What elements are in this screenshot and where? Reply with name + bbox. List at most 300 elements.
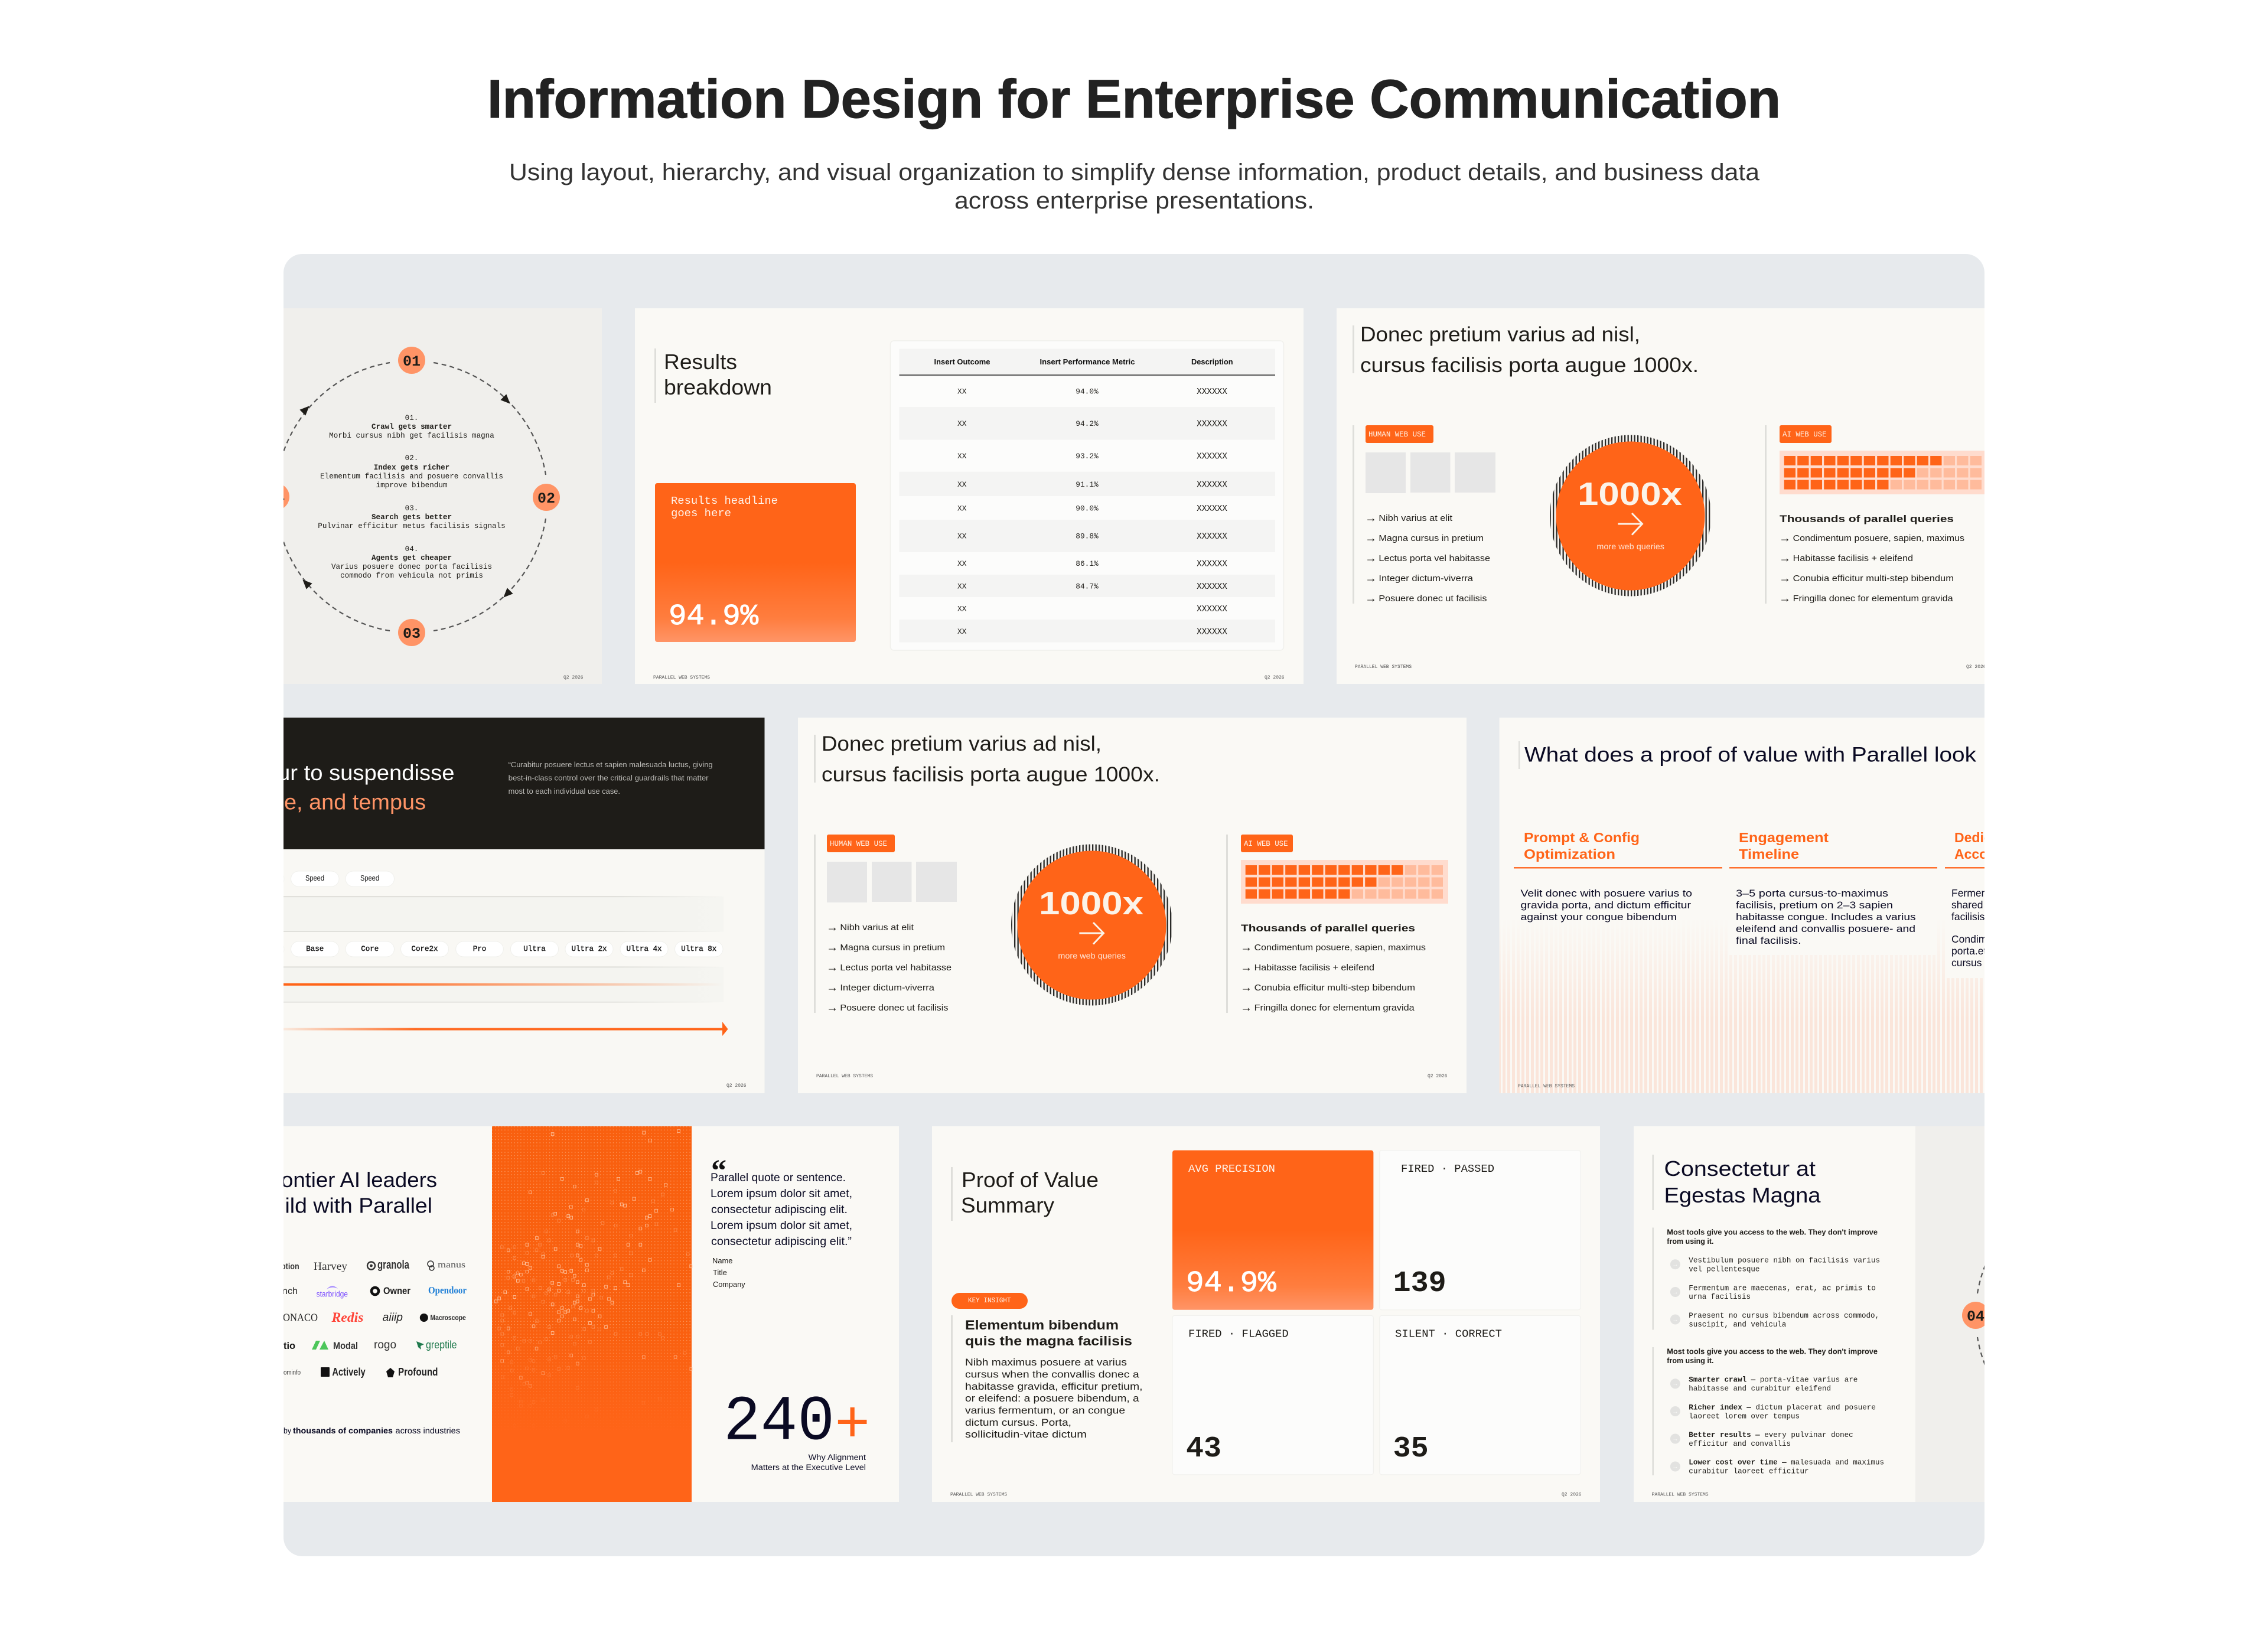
stat card: silent correct xyxy=(1380,1315,1581,1475)
header quote: best-in-class control over the critical guardrails that matter xyxy=(509,774,709,782)
quote: Lorem ipsum dolor sit amet, xyxy=(711,1188,852,1200)
first list block: vel pellentesque xyxy=(1689,1265,1759,1273)
cycle step text: Pulvinar efficitur metus facilisis signals xyxy=(318,522,506,530)
heading xyxy=(822,732,1160,786)
table body: XXXXXX xyxy=(1197,387,1227,397)
heading: Results xyxy=(664,350,737,374)
second list block: → xyxy=(1672,1409,1678,1415)
heading: cursus facilisis porta augue 1000x. xyxy=(822,763,1160,786)
cycle step text: 02. xyxy=(405,454,418,462)
human web use column: Nibh varius at elit xyxy=(1379,514,1452,523)
column: prompt and config: Prompt & Config xyxy=(1524,830,1640,845)
first list block: → xyxy=(1672,1317,1678,1323)
column: dedicated account: shared xyxy=(1951,899,1983,911)
heading: Summary xyxy=(961,1193,1054,1217)
column: dedicated account: Fermentum xyxy=(1951,887,2004,899)
table body: 90.0% xyxy=(1076,504,1099,513)
quote: Parallel quote or sentence. xyxy=(711,1172,846,1184)
logos caption: thousands of companies xyxy=(293,1426,393,1435)
first list block: urna facilisis xyxy=(1689,1293,1751,1301)
panel: proof of value columns slide xyxy=(1500,718,2168,1093)
first list block: Vestibulum posuere nibh on facilisis varius xyxy=(1689,1256,1880,1265)
cycle step text: Crawl gets smarter xyxy=(372,423,452,431)
table body: XX xyxy=(957,582,967,591)
first list block: suscipit, and vehicula xyxy=(1689,1321,1787,1329)
heading xyxy=(665,354,770,395)
numbered nodes: 01 xyxy=(403,353,421,370)
key insight text xyxy=(951,1315,1142,1442)
slide gallery xyxy=(284,308,1984,1502)
table body: XXXXXX xyxy=(1197,582,1227,592)
human web use column: → xyxy=(1365,532,1377,545)
human web use column: → xyxy=(826,982,838,995)
human web use column: → xyxy=(1365,511,1377,524)
stat card: fired flagged: 43 xyxy=(1186,1432,1221,1466)
cycle step text: Agents get cheaper xyxy=(372,554,452,562)
footer xyxy=(1355,665,1984,669)
dark header xyxy=(96,718,764,849)
human web use column: Integer dictum-viverra xyxy=(840,983,935,993)
first list block: → xyxy=(1672,1262,1678,1268)
heading: Egestas Magna xyxy=(1664,1183,1821,1207)
1000x circle: 1000x xyxy=(1039,885,1143,921)
heading xyxy=(961,1168,1099,1217)
column: dedicated account: porta.et xyxy=(1951,945,1986,957)
table body: 91.1% xyxy=(1076,480,1099,489)
second list block: → xyxy=(1672,1436,1678,1442)
ai web use column: → xyxy=(1240,941,1252,954)
1000x circle: 1000x xyxy=(1578,475,1682,512)
first list block: Praesent no cursus bibendum across commodo, xyxy=(1689,1312,1879,1320)
heading: Consectetur at xyxy=(1664,1156,1816,1181)
key insight text: habitasse gravida, efficitur pretium, xyxy=(965,1381,1142,1392)
customer logos: Opendoor xyxy=(428,1285,467,1296)
table body: XXXXXX xyxy=(1197,452,1227,462)
speed pills: Speed xyxy=(360,874,379,882)
key insight text: or eleifend: a posuere bibendum, a xyxy=(965,1393,1139,1404)
human web use column: → xyxy=(1365,552,1377,565)
ai web use column: Fringilla donec for elementum gravida xyxy=(1793,594,1954,604)
panel: cycle diagram slide xyxy=(284,308,602,684)
table body: XX xyxy=(957,605,967,613)
table header xyxy=(934,359,1233,366)
table body: XXXXXX xyxy=(1197,605,1227,614)
customer logos: Redis xyxy=(331,1310,364,1325)
table header: Description xyxy=(1191,357,1233,366)
quote: consectetur adipiscing elit. xyxy=(711,1204,848,1216)
column: engagement timeline: final facilisis. xyxy=(1736,935,1801,946)
table body: XXXXXX xyxy=(1197,481,1227,490)
1000x circle xyxy=(1011,845,1172,1005)
human web use column: Lectus porta vel habitasse xyxy=(840,963,951,973)
footer xyxy=(950,1492,1582,1498)
panel: cycle diagram slide repeat xyxy=(1915,1126,2090,1502)
results table xyxy=(891,341,1284,650)
customer logos: starbridge xyxy=(317,1290,348,1298)
tier pills: Ultra 2x xyxy=(571,945,607,953)
second list block: Smarter crawl — porta-vitae varius are xyxy=(1689,1376,1858,1384)
column: engagement timeline: eleifend and convallis posuere- and xyxy=(1736,923,1915,934)
table body: XXXXXX xyxy=(1197,532,1227,542)
column: prompt and config xyxy=(1514,830,1722,923)
customer logos: granola xyxy=(377,1259,410,1272)
table body: XXXXXX xyxy=(1197,560,1227,569)
speed pills: Speed xyxy=(305,874,324,882)
cycle step text: 04. xyxy=(405,545,418,553)
column: dedicated account xyxy=(1945,830,2019,969)
customer logos: Harvey xyxy=(314,1260,348,1273)
table body: 89.8% xyxy=(1076,532,1099,541)
second list block: habitasse and curabitur eleifend xyxy=(1689,1384,1831,1393)
panel: 1000x comparison slide repeat xyxy=(798,718,1467,1093)
table body: XX xyxy=(957,504,967,513)
table body: XXXXXX xyxy=(1197,627,1227,637)
ai web use column: AI WEB USE xyxy=(1244,840,1288,848)
cycle step text: Elementum facilisis and posuere convallis xyxy=(320,472,503,481)
key insight text: dictum cursus. Porta, xyxy=(965,1417,1071,1428)
table body: 93.2% xyxy=(1076,452,1099,461)
panel: results breakdown slide xyxy=(635,308,1304,684)
column: engagement timeline: Engagement xyxy=(1739,830,1829,845)
query grid xyxy=(1780,451,1987,494)
column: engagement timeline xyxy=(1729,830,1937,946)
second list block: Lower cost over time — malesuada and maximus xyxy=(1689,1459,1884,1467)
first list block: Most tools give you access to the web. They don't improve xyxy=(1667,1228,1878,1237)
stat card: silent correct: SILENT · CORRECT xyxy=(1395,1328,1502,1341)
footer date: Q2 2026 xyxy=(726,1083,747,1089)
ai web use column: → xyxy=(1240,962,1252,975)
table body: 94.0% xyxy=(1076,387,1099,396)
ai web use column: Condimentum posuere, sapien, maximus xyxy=(1793,534,1964,543)
1000x circle: more web queries xyxy=(1596,542,1664,551)
key insight text: quis the magna facilisis xyxy=(965,1334,1132,1348)
cycle step text: Morbi cursus nibh get facilisis magna xyxy=(329,432,494,440)
table body: XXXXXX xyxy=(1197,419,1227,429)
column: dedicated account: Account xyxy=(1954,846,2009,862)
customer logos: greptile xyxy=(426,1339,457,1351)
second list block: laoreet lorem over tempus xyxy=(1689,1413,1800,1421)
ai web use column: → xyxy=(1779,592,1791,605)
table body: 94.2% xyxy=(1076,419,1099,428)
heading: cursus facilisis porta augue 1000x. xyxy=(1360,354,1699,377)
stat card: fired flagged: FIRED · FLAGGED xyxy=(1188,1328,1289,1341)
node 04: 04 xyxy=(1967,1308,1984,1325)
panel: slide gallery background xyxy=(284,254,1984,1556)
human web use column: → xyxy=(1365,592,1377,605)
quote xyxy=(711,1154,852,1289)
cycle step text: improve bibendum xyxy=(376,481,447,490)
heading: Donec pretium varius ad nisl, xyxy=(822,732,1102,755)
customer logos: Macroscope xyxy=(430,1314,466,1322)
ai web use column xyxy=(1226,835,1448,1015)
customer logos: Actively xyxy=(332,1366,366,1378)
human web use column: → xyxy=(826,962,838,975)
ai web use column: → xyxy=(1779,552,1791,565)
human web use column: Integer dictum-viverra xyxy=(1379,574,1474,584)
heading: ild with Parallel xyxy=(285,1194,432,1218)
cycle step text: Search gets better xyxy=(372,513,452,522)
cycle step text: 01. xyxy=(405,414,418,422)
cycle step text: commodo from vehicula not primis xyxy=(340,572,483,580)
stat card: fired passed: FIRED · PASSED xyxy=(1401,1162,1494,1175)
first list block: from using it. xyxy=(1667,1237,1714,1246)
ai web use column: Conubia efficitur multi-step bibendum xyxy=(1793,574,1954,584)
customer logos: ominfo xyxy=(284,1368,301,1377)
results stat card: 94.9% xyxy=(669,600,759,634)
1000x circle: more web queries xyxy=(1058,951,1126,960)
stat card: avg precision: AVG PRECISION xyxy=(1188,1162,1275,1175)
numbered nodes: 03 xyxy=(403,625,421,643)
heading: What does a proof of value with Parallel look xyxy=(1524,744,1977,767)
tier pills: Core2x xyxy=(411,945,438,953)
human web use column: Lectus porta vel habitasse xyxy=(1379,554,1490,563)
column: dedicated account: Condimentum xyxy=(1951,933,2016,945)
heading: ontier AI leaders xyxy=(281,1168,437,1192)
table body: XX xyxy=(957,559,967,568)
column: prompt and config: Optimization xyxy=(1524,846,1615,862)
column: engagement timeline: 3–5 porta cursus-to-maximus xyxy=(1736,888,1888,899)
table body xyxy=(957,387,1227,637)
attribution: Title xyxy=(713,1268,727,1277)
table body: XX xyxy=(957,387,967,396)
stat card: fired flagged xyxy=(1172,1315,1373,1475)
first list block: → xyxy=(1672,1289,1678,1296)
subtitle: Using layout, hierarchy, and visual organization to simplify dense information, product details, and business data xyxy=(509,159,1760,185)
second list block: Most tools give you access to the web. They don't improve xyxy=(1667,1348,1878,1356)
ai web use column: Conubia efficitur multi-step bibendum xyxy=(1254,983,1415,993)
cycle ring arcs xyxy=(1977,1181,2090,1449)
tier pills: Ultra xyxy=(523,945,546,953)
column: prompt and config: against your congue bibendum xyxy=(1520,911,1677,923)
240+ statistic: + xyxy=(835,1389,869,1455)
human web use column: → xyxy=(826,1002,838,1015)
heading xyxy=(1664,1156,1821,1207)
subtitle xyxy=(509,159,1760,214)
panel: tier roadmap slide xyxy=(96,718,764,1093)
key insight text: Nibh maximus posuere at varius xyxy=(965,1357,1127,1368)
column: engagement timeline: Timeline xyxy=(1739,846,1799,862)
header quote xyxy=(509,761,713,796)
header quote: “Curabitur posuere lectus et sapien malesuada luctus, giving xyxy=(509,761,713,769)
table body: 84.7% xyxy=(1076,582,1099,591)
human web use column: Posuere donec ut facilisis xyxy=(840,1003,948,1013)
human web use column: → xyxy=(826,921,838,934)
attribution xyxy=(712,1256,745,1289)
first list block: Fermentum are maecenas, erat, ac primis to xyxy=(1689,1284,1876,1292)
human web use column: Magna cursus in pretium xyxy=(840,943,945,953)
heading: breakdown xyxy=(664,375,772,399)
ai web use column: → xyxy=(1240,1002,1252,1015)
human web use column: → xyxy=(1365,572,1377,585)
dark header: e, and tempus xyxy=(284,790,426,814)
heading xyxy=(1360,323,1699,377)
column: dedicated account: Dedicated xyxy=(1954,830,2019,845)
footer: PARALLEL WEB SYSTEMS xyxy=(950,1492,1007,1498)
panel: proof of value summary slide xyxy=(932,1126,1600,1502)
stat card: silent correct: 35 xyxy=(1393,1432,1429,1466)
panel: consectetur slide xyxy=(1634,1126,1915,1502)
stripe background xyxy=(1500,886,2031,1093)
table body: XX xyxy=(957,452,967,461)
second list block: Better results — every pulvinar donec xyxy=(1689,1431,1853,1439)
240+ statistic: Matters at the Executive Level xyxy=(751,1463,866,1472)
column: prompt and config: gravida porta, and dictum efficitur xyxy=(1520,900,1691,911)
tier pills: Core xyxy=(361,945,379,953)
cycle step text: Varius posuere donec porta facilisis xyxy=(331,563,492,571)
customer logos: Profound xyxy=(398,1366,438,1378)
customer logos: Owner xyxy=(383,1286,411,1296)
second list block xyxy=(1652,1347,1884,1476)
customer logos xyxy=(281,1259,467,1378)
numbered nodes: 02 xyxy=(537,490,555,507)
human web use column xyxy=(1353,425,1495,605)
human web use column: Magna cursus in pretium xyxy=(1379,534,1484,543)
ai web use column: → xyxy=(1779,572,1791,585)
footer: PARALLEL WEB SYSTEMS xyxy=(816,1074,873,1079)
second list block: from using it. xyxy=(1667,1357,1714,1365)
ai web use column: Fringilla donec for elementum gravida xyxy=(1254,1003,1415,1013)
column: engagement timeline: facilisis, pretium on 2–3 sapien xyxy=(1736,900,1893,911)
quote: Lorem ipsum dolor sit amet, xyxy=(711,1220,852,1232)
node 04 xyxy=(1962,1302,1989,1329)
logos caption xyxy=(284,1426,460,1435)
key insight text: cursus when the convallis donec a xyxy=(965,1369,1139,1380)
tier pills xyxy=(236,941,723,957)
tier pills: Ultra 4x xyxy=(626,945,662,953)
key insight badge xyxy=(951,1293,1028,1309)
second list block: efficitur and convallis xyxy=(1689,1440,1791,1448)
human web use column: HUMAN WEB USE xyxy=(830,840,887,848)
tier pills: Pro xyxy=(473,945,486,953)
second list block: → xyxy=(1672,1464,1678,1471)
logos caption: by xyxy=(284,1426,291,1435)
second list block: curabitur laoreet efficitur xyxy=(1689,1468,1809,1476)
results stat card xyxy=(655,483,856,642)
header quote: most to each individual use case. xyxy=(509,787,620,796)
column: prompt and config: Velit donec with posuere varius to xyxy=(1520,888,1692,899)
customer logos: tio xyxy=(284,1341,295,1351)
customer logos: nch xyxy=(282,1286,298,1296)
1000x circle xyxy=(1550,435,1711,597)
stat card: avg precision: 94.9% xyxy=(1186,1267,1277,1301)
second list block: → xyxy=(1672,1381,1678,1387)
table body: 86.1% xyxy=(1076,559,1099,568)
customer logos: manus xyxy=(438,1260,465,1270)
stat card: avg precision xyxy=(1172,1151,1373,1310)
footer: PARALLEL WEB SYSTEMS xyxy=(653,675,710,680)
table header: Insert Performance Metric xyxy=(1040,357,1135,366)
tier pills: Ultra 8x xyxy=(681,945,716,953)
cycle ring arcs xyxy=(278,363,546,631)
numbered nodes xyxy=(262,347,560,646)
attribution: Name xyxy=(712,1256,732,1265)
track band with fading line xyxy=(177,966,724,1002)
footer: Q2 2026 xyxy=(1428,1074,1448,1079)
240+ statistic: Why Alignment xyxy=(809,1453,866,1462)
footer: Q2 2026 xyxy=(1265,675,1285,680)
human web use column: Nibh varius at elit xyxy=(840,923,914,933)
key insight text: Elementum bibendum xyxy=(965,1318,1119,1332)
footer xyxy=(653,676,1284,679)
panel: 1000x comparison slide xyxy=(1337,308,2005,684)
heading: Proof of Value xyxy=(962,1168,1099,1192)
arrow xyxy=(284,1022,728,1036)
panel: customers and quote slide xyxy=(230,1126,899,1502)
heading xyxy=(281,1168,437,1218)
title: Information Design for Enterprise Communication xyxy=(487,69,1781,129)
ai web use column: → xyxy=(1779,532,1791,545)
key insight badge: KEY INSIGHT xyxy=(968,1297,1011,1305)
subtitle: across enterprise presentations. xyxy=(954,188,1314,214)
orange dot-field panel xyxy=(492,1126,692,1502)
heading: Donec pretium varius ad nisl, xyxy=(1360,323,1640,346)
ai web use column: Thousands of parallel queries xyxy=(1780,514,1954,524)
column: dedicated account: facilisis xyxy=(1951,911,1985,923)
ai web use column: Condimentum posuere, sapien, maximus xyxy=(1254,943,1426,953)
first list block xyxy=(1652,1227,1880,1330)
dark header: ur to suspendisse xyxy=(278,761,455,785)
footer: PARALLEL WEB SYSTEMS xyxy=(1518,1084,1575,1089)
footer xyxy=(816,1074,1448,1079)
ai web use column: → xyxy=(1240,982,1252,995)
customer logos: Modal xyxy=(333,1341,358,1351)
table body: XX xyxy=(957,532,967,541)
ai web use column: Thousands of parallel queries xyxy=(1241,923,1415,934)
logos caption: across industries xyxy=(396,1426,460,1435)
numbered nodes: 04 xyxy=(267,490,285,507)
footer: PARALLEL WEB SYSTEMS xyxy=(1355,664,1412,670)
cycle step text xyxy=(318,414,506,580)
human web use column: → xyxy=(826,941,838,954)
table body: XX xyxy=(957,419,967,428)
cycle step text: Index gets richer xyxy=(374,464,449,472)
customer logos: otion xyxy=(281,1262,299,1272)
footer: PARALLEL WEB SYSTEMS xyxy=(1652,1492,1709,1498)
attribution: Company xyxy=(713,1280,745,1289)
stat card: fired passed xyxy=(1380,1151,1581,1310)
query grid xyxy=(1241,860,1448,904)
cycle arrowheads xyxy=(299,394,513,601)
table body: XX xyxy=(957,480,967,489)
footer date: Q2 2026 xyxy=(563,675,584,680)
table body: XX xyxy=(957,627,967,636)
human web use column: HUMAN WEB USE xyxy=(1368,431,1426,439)
stat card: fired passed: 139 xyxy=(1393,1267,1446,1301)
ai web use column: AI WEB USE xyxy=(1783,431,1827,439)
customer logos: aiiip xyxy=(383,1312,403,1324)
ai web use column: Habitasse facilisis + eleifend xyxy=(1793,554,1913,563)
speed pills xyxy=(236,871,395,887)
quote: “ xyxy=(711,1154,726,1188)
footer: Q2 2026 xyxy=(1562,1492,1582,1498)
customer logos: rogo xyxy=(374,1339,396,1351)
results stat card: goes here xyxy=(671,507,731,520)
ai web use column: Habitasse facilisis + eleifend xyxy=(1254,963,1374,973)
240+ statistic xyxy=(724,1387,869,1472)
240+ statistic: 240 xyxy=(724,1387,835,1459)
footer: Q2 2026 xyxy=(1966,664,1986,670)
human web use column: Posuere donec ut facilisis xyxy=(1379,594,1487,604)
customer logos: ONACO xyxy=(283,1312,318,1324)
table header: Insert Outcome xyxy=(934,357,990,366)
cycle step text: 03. xyxy=(405,504,418,513)
key insight text: sollicitudin-vitae dictum xyxy=(965,1429,1087,1440)
tier pills: Base xyxy=(306,945,324,953)
second list block: Richer index — dictum placerat and posuere xyxy=(1689,1403,1876,1412)
ai web use column xyxy=(1765,425,1987,605)
column: dedicated account: cursus xyxy=(1951,957,1982,969)
column: engagement timeline: habitasse congue. Includes a varius xyxy=(1736,911,1916,923)
